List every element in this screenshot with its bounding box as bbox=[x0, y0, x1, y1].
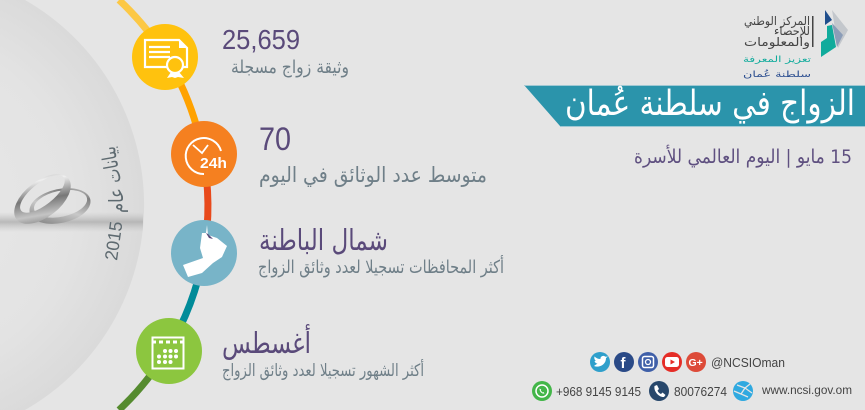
rotated year label: بيانات bbox=[96, 145, 126, 185]
icon: certificate bbox=[132, 24, 198, 90]
stat: certificates number: 25,659 bbox=[222, 24, 300, 55]
social handle: @NCSIOman bbox=[711, 355, 785, 370]
icon: 24h clock bbox=[171, 121, 237, 187]
logo bbox=[743, 10, 848, 80]
stat: top governorate caption: أكثر المحافظات تسجيلا لعدد وثائق الزواج bbox=[258, 255, 504, 278]
icon: phone bbox=[649, 381, 669, 401]
subtitle date: 15 مايو | اليوم العالمي للأسرة bbox=[634, 145, 852, 168]
icon: whatsapp bbox=[532, 381, 552, 401]
website: www.ncsi.gov.om bbox=[761, 383, 852, 397]
big grey circle panel bbox=[0, 0, 144, 410]
rotated year label: 2015 bbox=[101, 220, 126, 262]
stat: daily average number: 70 bbox=[259, 121, 291, 157]
logo: للإحصاء bbox=[774, 24, 810, 38]
social media icons bbox=[590, 352, 706, 372]
stat: certificates caption: وثيقة زواج مسجلة bbox=[231, 57, 349, 78]
rotated year label: عام bbox=[104, 188, 128, 213]
stat: top month: أغسطس bbox=[222, 323, 311, 360]
icon: globe bbox=[733, 381, 753, 401]
logo: والمعلومات bbox=[744, 35, 810, 50]
icon: calendar bbox=[136, 318, 202, 384]
logo: تعزيز المعرفة bbox=[743, 55, 812, 65]
icon: 24h clock: 24h bbox=[200, 155, 227, 172]
social media icons: f bbox=[620, 355, 626, 372]
whatsapp number: +968 9145 9145 bbox=[556, 384, 641, 399]
stat: top month caption: أكثر الشهور تسجيلا لعدد وثائق الزواج bbox=[222, 359, 424, 381]
social media icons: G+ bbox=[688, 357, 703, 369]
stat: top governorate: شمال الباطنة bbox=[259, 223, 388, 257]
logo: المركز الوطني bbox=[744, 14, 810, 29]
timeline arc bbox=[119, 0, 208, 410]
rotated year label bbox=[96, 145, 128, 262]
hotline number: 80076274 bbox=[674, 384, 727, 399]
icon: wedding rings bbox=[0, 164, 143, 234]
logo: سلطنة عُمان bbox=[743, 69, 811, 80]
stat: daily average caption: متوسط عدد الوثائق في اليوم bbox=[259, 163, 487, 187]
icon: Oman map bbox=[171, 220, 237, 286]
